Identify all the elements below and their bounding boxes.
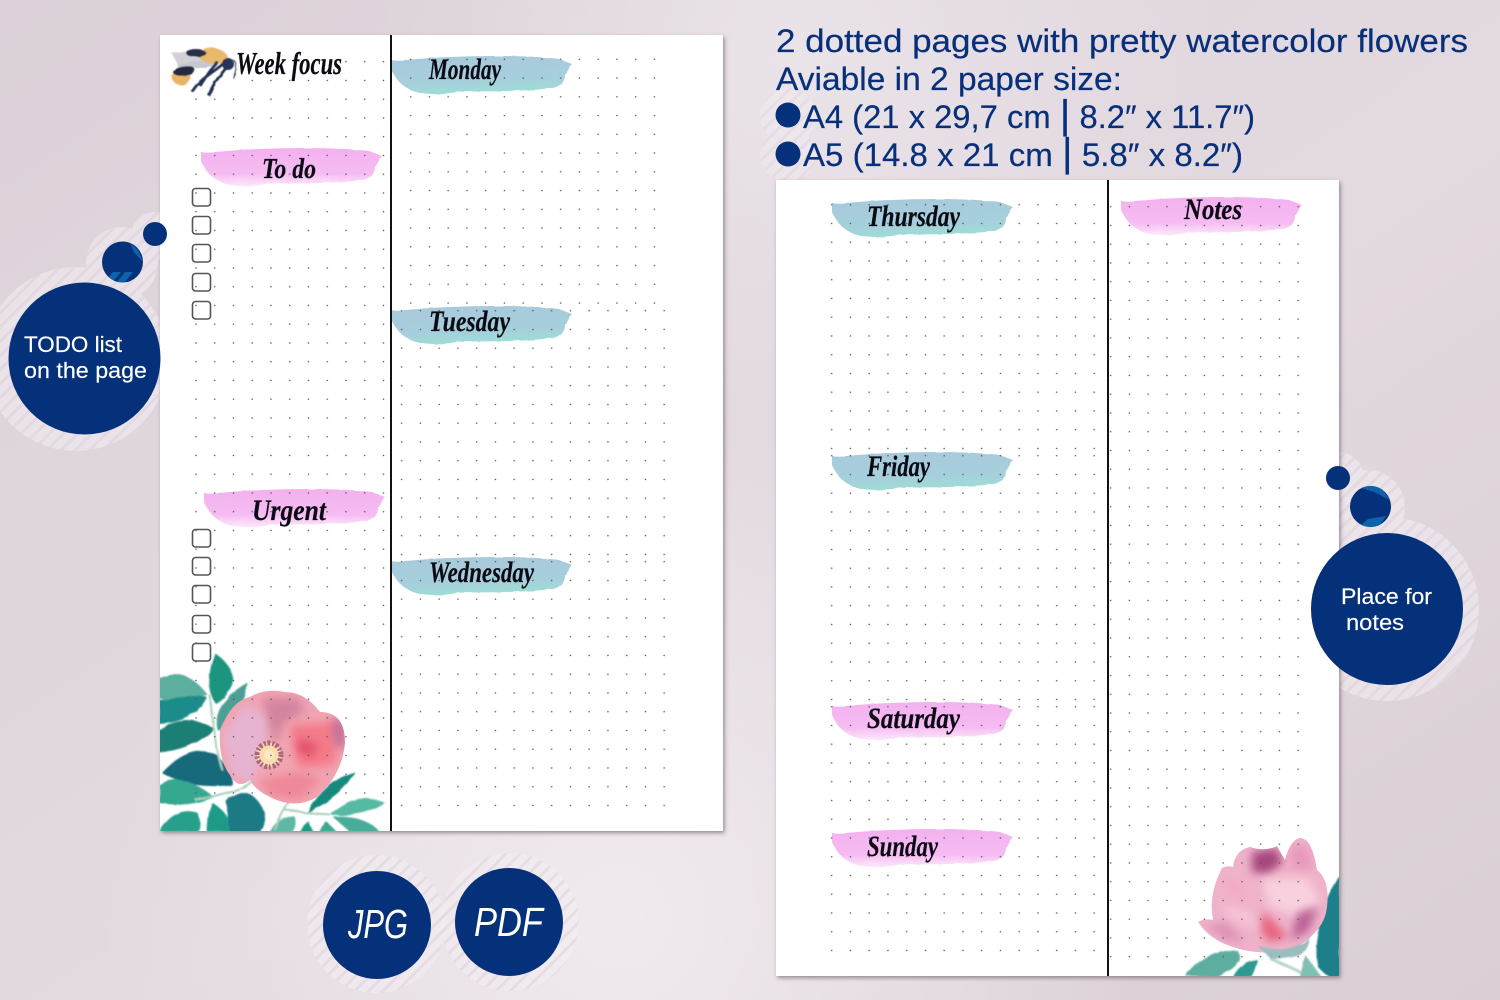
badge halo: [441, 853, 579, 991]
page sheet: [776, 180, 1339, 976]
panel: right planner page: [776, 180, 1340, 977]
medium bubble: [102, 242, 143, 283]
heading: Sunday: Sunday: [867, 830, 939, 863]
dot grid: Tuesday block: [392, 301, 674, 564]
badge halo: [307, 855, 445, 993]
column divider: [1107, 180, 1109, 976]
striped halo: header bullets: [760, 88, 816, 182]
size A4: A4 (21 x 29,7 cm | 8.2″ x 11.7″): [803, 93, 1255, 137]
dot grid: Monday block: [401, 50, 664, 312]
heading: Thursday: Thursday: [867, 200, 961, 233]
brush: Wednesday: [391, 557, 572, 595]
badge disc: [455, 868, 563, 976]
dot grid: weekend block: [822, 697, 1104, 960]
icon: watercolor bee: [172, 46, 236, 96]
brush: Friday: [832, 452, 1013, 490]
badge: PDF: [441, 853, 579, 991]
checkboxes: urgent: [192, 530, 210, 661]
main bubble: [1311, 533, 1463, 685]
brush: Sunday: [832, 829, 1013, 867]
callout text line 1: TODO list: [24, 332, 122, 357]
illustration: peony with leaves: [1186, 835, 1340, 977]
dot grid: Thursday block: [822, 195, 1104, 458]
bullet A5: [776, 142, 800, 166]
callout text line 2: on the page: [24, 358, 147, 383]
heading: Wednesday: Wednesday: [429, 556, 535, 589]
dot grid: week column: [187, 52, 393, 802]
badge label: JPG: [347, 901, 408, 947]
heading: Notes: Notes: [1183, 193, 1242, 226]
brush: Tuesday: [391, 306, 572, 344]
rose centre: [257, 743, 281, 767]
heading: Saturday: Saturday: [867, 702, 961, 735]
striped halo: right callout: [1295, 452, 1479, 701]
heading: Week focus: Week focus: [236, 45, 342, 81]
main bubble: [8, 282, 160, 434]
heading: Tuesday: Tuesday: [429, 305, 511, 338]
heading: To do: To do: [262, 154, 316, 185]
dot grid: Wednesday block: [392, 552, 674, 815]
medium bubble: [1350, 486, 1391, 528]
illustration: wild rose with leaves: [159, 653, 385, 832]
badge label: PDF: [474, 899, 545, 945]
heading line 2: Aviable in 2 paper size:: [776, 61, 1122, 97]
heading line 1: 2 dotted pages with pretty watercolor flowers: [776, 23, 1468, 59]
brush: Monday: [391, 56, 572, 94]
badge: JPG: [307, 855, 445, 993]
brush: Urgent: [204, 489, 385, 527]
page sheet: [160, 35, 723, 831]
size A5: A5 (14.8 x 21 cm | 5.8″ x 8.2″): [803, 131, 1243, 175]
header text block: [776, 23, 1468, 175]
brush: Thursday: [832, 199, 1013, 237]
peony sepal: [1258, 935, 1310, 959]
heading: Monday: Monday: [428, 53, 501, 86]
column divider: [390, 35, 392, 831]
small bubble: [1326, 466, 1350, 490]
title mask: [160, 36, 345, 90]
striped halo: left callout: [0, 212, 179, 451]
brush: To do: [201, 148, 382, 186]
small bubble: [143, 222, 167, 246]
heading: Friday: Friday: [866, 450, 931, 483]
callout: place for notes: [1311, 466, 1463, 685]
heading: Urgent: Urgent: [252, 494, 327, 527]
brush: Saturday: [832, 702, 1013, 740]
callout: TODO list: [8, 222, 167, 434]
dot grid: Friday block: [822, 446, 1104, 709]
callout text line 1: Place for: [1341, 584, 1432, 609]
checkboxes: to do: [192, 188, 210, 319]
dot grid: notes column: [1101, 197, 1308, 966]
panel: left planner page: [159, 35, 723, 832]
callout text line 2: notes: [1346, 610, 1404, 635]
bullet A4: [776, 102, 800, 128]
badge disc: [323, 871, 431, 979]
brush: Notes: [1121, 197, 1302, 235]
